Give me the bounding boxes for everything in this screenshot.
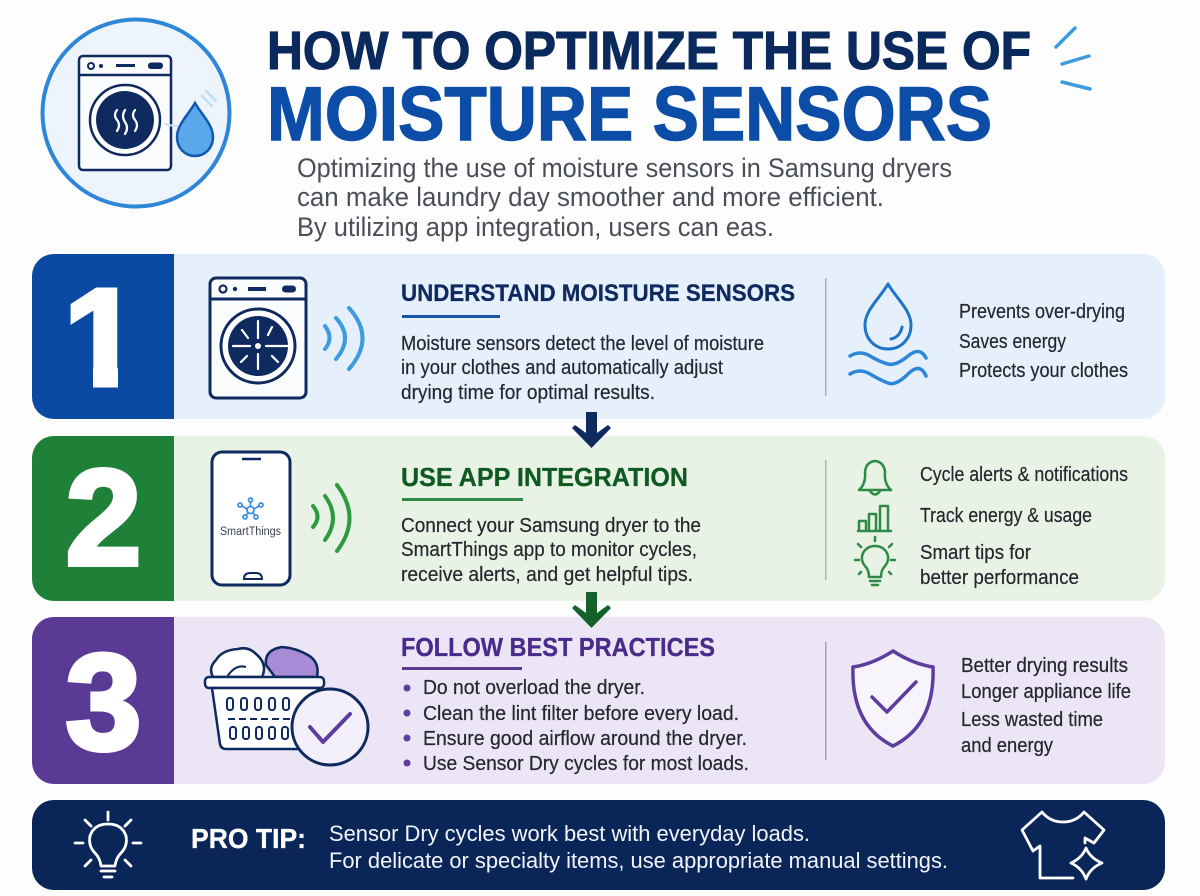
feature list: Cycle alerts & notifications xyxy=(920,464,1128,486)
icon: light bulb xyxy=(855,537,895,585)
header icon: dryer with water drop xyxy=(42,20,230,206)
label: PRO TIP: xyxy=(191,823,306,854)
icon: dryer with sensor burst xyxy=(210,278,306,398)
title: MOISTURE SENSORS xyxy=(267,72,992,157)
intro text: By utilizing app integration, users can eas. xyxy=(297,212,774,242)
icon: shield with check xyxy=(853,651,933,746)
intro text xyxy=(297,153,952,242)
benefits list: Less wasted time xyxy=(961,709,1103,731)
description: drying time for optimal results. xyxy=(401,382,655,404)
tip text: For delicate or specialty items, use appropriate manual settings. xyxy=(329,848,948,873)
bulleted list: Ensure good airflow around the dryer. xyxy=(423,728,747,750)
icon: water drop and waves xyxy=(850,284,926,384)
heading: FOLLOW BEST PRACTICES xyxy=(401,634,715,662)
arrow: step 1 to step 2 xyxy=(572,412,611,448)
icon: t-shirt with sparkle xyxy=(1022,812,1104,879)
description: Connect your Samsung dryer to the xyxy=(401,515,701,537)
description: receive alerts, and get helpful tips. xyxy=(401,564,693,586)
tip text xyxy=(329,821,948,873)
icon: bell xyxy=(859,461,891,494)
icon: laundry basket with check xyxy=(205,647,368,765)
bulleted list: Clean the lint filter before every load. xyxy=(423,703,739,725)
benefits list: Better drying results xyxy=(961,655,1128,677)
description: Moisture sensors detect the level of moisture xyxy=(401,333,764,355)
feature list: better performance xyxy=(920,567,1079,589)
heading: USE APP INTEGRATION xyxy=(401,462,688,492)
intro text: Optimizing the use of moisture sensors in Samsung dryers xyxy=(297,153,952,183)
benefits list: Prevents over-drying xyxy=(959,301,1125,323)
icon: bar chart xyxy=(858,506,891,531)
icon: sensor waves xyxy=(325,308,362,369)
title xyxy=(267,21,1031,157)
benefits list: and energy xyxy=(961,735,1053,757)
icon: light bulb xyxy=(75,812,141,877)
panel 3: follow best practices xyxy=(32,617,1165,784)
number 2: 2 xyxy=(66,442,141,594)
description xyxy=(401,333,764,404)
feature list xyxy=(920,464,1128,589)
description: SmartThings app to monitor cycles, xyxy=(401,539,697,561)
decorative sparks icon xyxy=(1056,28,1090,89)
intro text: can make laundry day smoother and more efficient. xyxy=(297,182,884,212)
benefits list: Protects your clothes xyxy=(959,360,1128,382)
bulleted list: Use Sensor Dry cycles for most loads. xyxy=(423,753,749,775)
benefits list xyxy=(959,301,1128,382)
bulleted list xyxy=(404,677,749,775)
icon: phone with SmartThings: SmartThings xyxy=(220,526,281,538)
feature list: Track energy & usage xyxy=(920,505,1092,527)
heading: UNDERSTAND MOISTURE SENSORS xyxy=(401,280,795,307)
arrow: step 2 to step 3 xyxy=(572,592,611,628)
feature list: Smart tips for xyxy=(920,542,1031,564)
description xyxy=(401,515,701,586)
number 1: 1 xyxy=(64,261,140,415)
panel 2: use app integration xyxy=(32,436,1165,601)
benefits list: Saves energy xyxy=(959,331,1066,353)
benefits list xyxy=(961,655,1131,757)
tip text: Sensor Dry cycles work best with everyday loads. xyxy=(329,821,810,846)
pro tip banner xyxy=(32,800,1165,890)
icon: phone with SmartThings xyxy=(212,452,290,585)
description: in your clothes and automatically adjust xyxy=(401,357,723,379)
title: HOW TO OPTIMIZE THE USE OF xyxy=(267,21,1031,81)
bulleted list: Do not overload the dryer. xyxy=(423,677,645,699)
benefits list: Longer appliance life xyxy=(961,681,1131,703)
number 3: 3 xyxy=(66,626,141,778)
panel 1: understand moisture sensors xyxy=(32,254,1165,419)
icon: connection waves xyxy=(313,485,350,551)
